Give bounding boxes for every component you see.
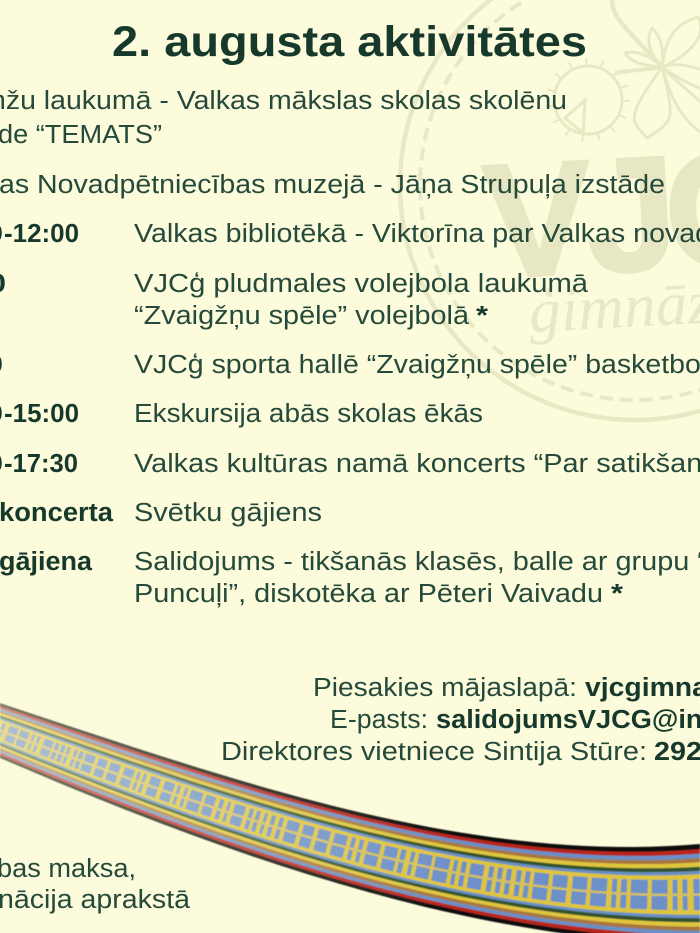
item: reunion: gājiena	[0, 548, 93, 576]
icon: chestnut	[550, 62, 626, 138]
item: excursion: Ekskursija abās skolas ēkās	[134, 400, 483, 428]
item: library quiz: Valkas bibliotēkā - Viktorīna par Valkas novadu	[134, 220, 700, 248]
item: basketball: VJCģ sporta hallē “Zvaigžņu spēle” basketbolā	[134, 351, 700, 379]
contact block: 292	[654, 738, 700, 766]
footnote: asterisk explanation	[0, 855, 191, 914]
item: beach volleyball: VJCģ pludmales volejbola laukumā	[134, 270, 589, 298]
item: concert: -17:30	[4, 450, 78, 478]
icon: chestnut leaf	[612, 0, 700, 138]
contact block	[221, 674, 700, 766]
contact block: Direktores vietniece Sintija Stūre:	[221, 738, 647, 766]
item: excursion: -15:00	[4, 400, 79, 428]
item: beach volleyball: “Zvaigžņu spēle” volejbolā	[134, 302, 470, 330]
item: reunion: Puncuļi”, diskotēka ar Pēteri Vaivadu	[134, 580, 603, 608]
item: exhibition TEMATS: de “TEMATS”	[0, 121, 162, 149]
item: beach volleyball: *	[476, 302, 488, 330]
item: reunion: *	[611, 580, 623, 608]
item: parade: Svētku gājiens	[134, 499, 322, 527]
item: excursion	[0, 400, 483, 428]
item: exhibition TEMATS: nžu laukumā - Valkas mākslas skolas skolēnu	[0, 87, 567, 115]
item: concert: Valkas kultūras namā koncerts “Par satikšanu”	[134, 450, 700, 478]
contact block: Piesakies mājaslapā:	[313, 674, 577, 702]
item: beach volleyball	[0, 270, 589, 330]
item: library quiz: -12:00	[4, 220, 79, 248]
item: reunion	[0, 548, 700, 608]
contact block: E-pasts:	[330, 706, 428, 734]
watermark: school emblem	[400, 0, 700, 420]
item: exhibition TEMATS	[0, 87, 567, 149]
footnote: asterisk explanation: nācija aprakstā	[0, 886, 191, 914]
item: museum exhibition: as Novadpētniecības muzejā - Jāņa Strupuļa izstāde	[0, 171, 665, 199]
title: 2. augusta aktivitātes	[112, 18, 587, 66]
item: parade: koncerta	[0, 499, 114, 527]
schedule	[0, 87, 700, 608]
decorative woven ribbon	[0, 695, 700, 933]
footnote: asterisk explanation: bas maksa,	[0, 855, 136, 883]
item: reunion: Salidojums - tikšanās klasēs, balle ar grupu “	[134, 548, 700, 576]
item: parade	[0, 499, 322, 527]
